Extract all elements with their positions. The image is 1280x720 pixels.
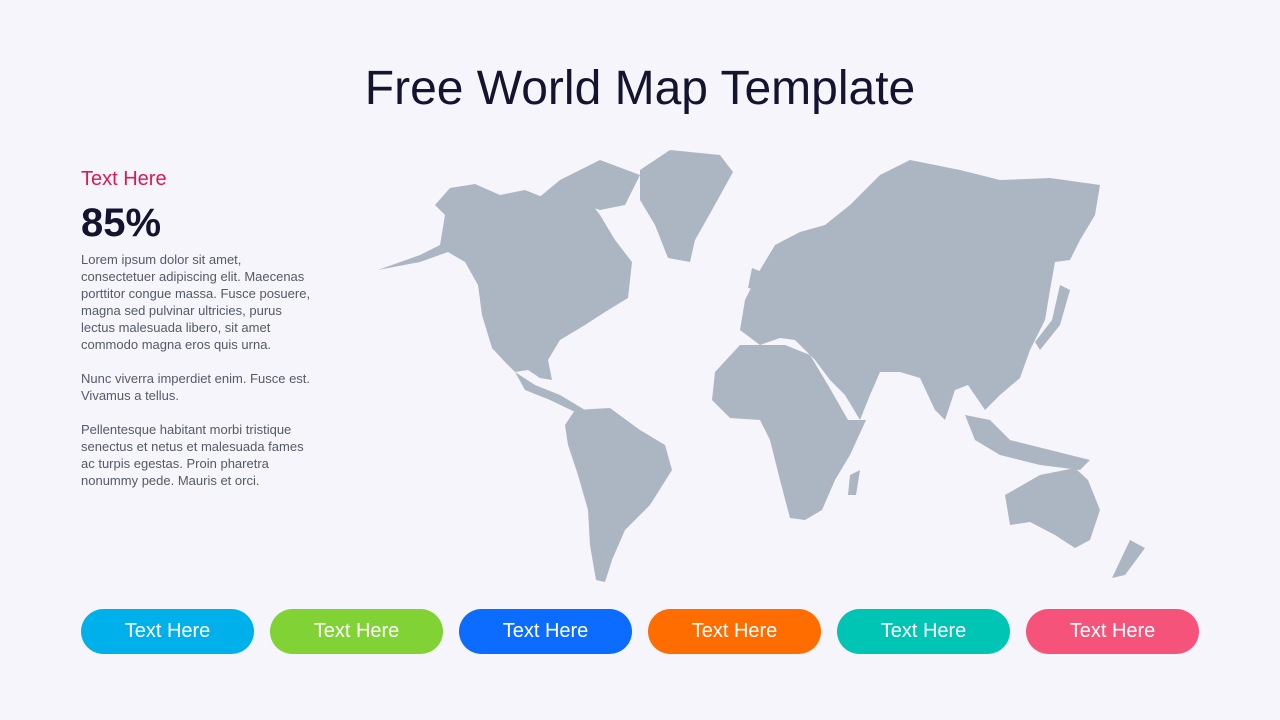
panel: stats text <box>81 168 310 488</box>
Greenland <box>640 150 733 262</box>
body text: ac turpis egestas. Proin pharetra <box>81 456 269 471</box>
Europe & Asia <box>740 160 1100 420</box>
body text: Lorem ipsum dolor sit amet, <box>81 252 241 267</box>
body text: lectus malesuada libero, sit amet <box>81 320 270 335</box>
title: Free World Map Template <box>365 62 915 115</box>
body text: senectus et netus et malesuada fames <box>81 439 304 454</box>
button: pink: Text Here <box>1070 620 1155 642</box>
button: teal: Text Here <box>881 620 966 642</box>
body text: nonummy pede. Mauris et orci. <box>81 473 259 488</box>
body text: Vivamus a tellus. <box>81 388 179 403</box>
Africa <box>712 345 866 520</box>
body text: consectetuer adipiscing elit. Maecenas <box>81 269 304 284</box>
Australia <box>1005 468 1100 548</box>
button: pink <box>1026 609 1199 654</box>
SE Asia islands <box>965 415 1090 470</box>
button: green <box>270 609 443 654</box>
North America <box>378 184 632 380</box>
body text: Nunc viverra imperdiet enim. Fusce est. <box>81 371 310 386</box>
button: blue <box>459 609 632 654</box>
button: teal <box>837 609 1010 654</box>
New Zealand <box>1112 540 1145 578</box>
South America <box>565 408 672 582</box>
button: cyan: Text Here <box>125 620 210 642</box>
body text: Pellentesque habitant morbi tristique <box>81 422 291 437</box>
button: orange <box>648 609 821 654</box>
button: blue: Text Here <box>503 620 588 642</box>
body text <box>81 252 310 488</box>
button: orange: Text Here <box>692 620 777 642</box>
Japan <box>1035 285 1070 350</box>
percentage: 85% <box>81 201 161 245</box>
body text: magna sed pulvinar ultricies, purus <box>81 303 282 318</box>
body text: commodo magna eros quis urna. <box>81 337 271 352</box>
button: cyan <box>81 609 254 654</box>
body text: porttitor congue massa. Fusce posuere, <box>81 286 310 301</box>
button: green: Text Here <box>314 620 399 642</box>
label: Text Here <box>81 168 167 190</box>
